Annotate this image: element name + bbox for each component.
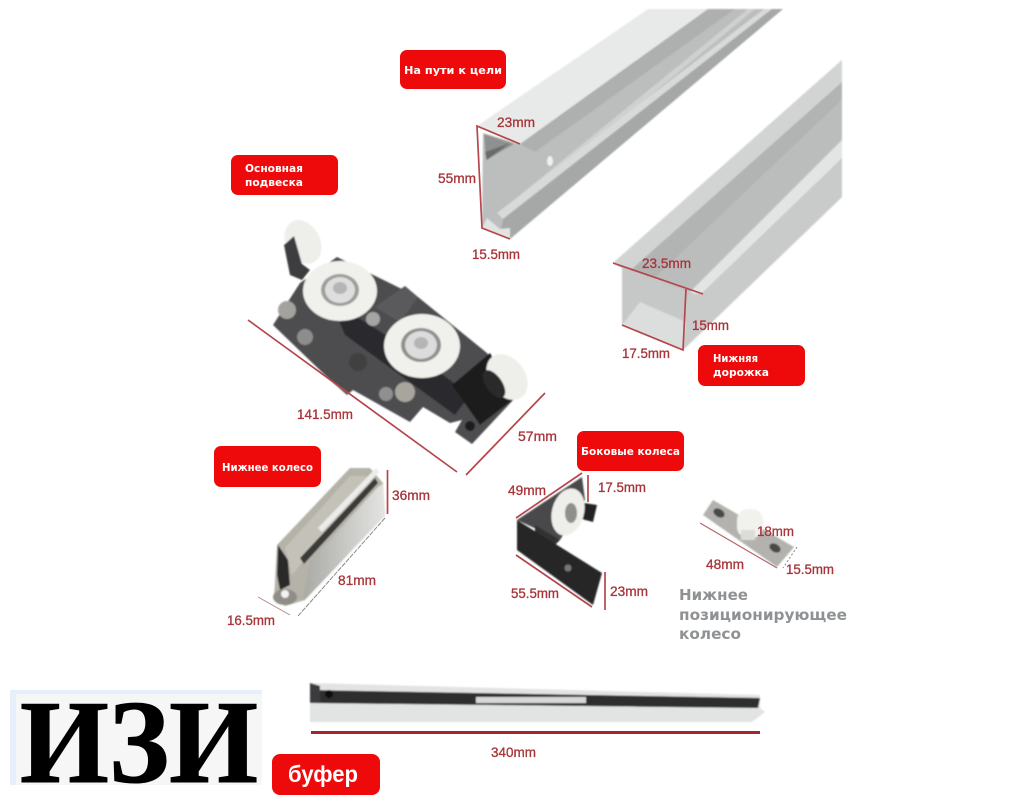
hanger dimension lines: 57mm — [518, 429, 557, 444]
heading label: lower track: дорожка — [713, 367, 769, 379]
heading label: buffer: буфер — [288, 761, 358, 787]
lower wheel part — [273, 468, 385, 606]
side wheel dimensions: 23mm — [610, 584, 648, 599]
heading label: lower track — [698, 345, 805, 386]
side wheel bracket — [517, 477, 602, 605]
caption: positioning wheel: Нижнее — [679, 586, 748, 604]
lower track dimensions: 23.5mm — [642, 256, 691, 271]
positioning wheel part — [703, 500, 794, 567]
upper track dimensions: 55mm — [438, 171, 476, 186]
upper track dimensions: 23mm — [497, 115, 535, 130]
heading label: main hanger — [231, 155, 338, 195]
upper track rail — [477, 9, 783, 239]
heading label: upper track: На пути к цели — [404, 65, 502, 77]
buffer dimension line: 340mm — [491, 745, 536, 760]
positioning wheel dimensions: 15.5mm — [786, 562, 834, 577]
lower track dimensions — [613, 256, 729, 361]
lower track dimensions: 17.5mm — [622, 346, 670, 361]
lower wheel dimensions: 16.5mm — [227, 613, 275, 628]
heading label: upper track — [400, 50, 506, 89]
upper track dimensions: 15.5mm — [472, 247, 520, 262]
side wheel dimensions — [508, 473, 648, 610]
caption: positioning wheel: колесо — [679, 625, 741, 643]
positioning wheel dimensions: 18mm — [757, 524, 794, 539]
roller hanger assembly — [273, 214, 536, 444]
hanger dimension lines — [248, 320, 557, 475]
heading label: main hanger: подвеска — [245, 177, 303, 189]
side wheel dimensions: 17.5mm — [598, 480, 646, 495]
positioning wheel dimensions: 48mm — [706, 557, 744, 572]
side wheel dimensions: 49mm — [508, 483, 546, 498]
heading label: side wheels: Боковые колеса — [581, 446, 680, 458]
hanger dimension lines: 141.5mm — [297, 407, 353, 422]
lower track dimensions: 15mm — [692, 318, 729, 333]
positioning wheel dimensions — [700, 523, 834, 577]
lower wheel dimensions: 81mm — [338, 573, 376, 588]
heading label: lower track: Нижняя — [713, 353, 758, 365]
heading label: main hanger: Основная — [245, 163, 303, 175]
heading label: lower wheel — [214, 446, 321, 487]
side wheel dimensions: 55.5mm — [511, 586, 559, 601]
lower wheel dimensions — [227, 470, 430, 628]
heading label: lower wheel: Нижнее колесо — [222, 462, 313, 474]
heading label: buffer — [272, 754, 380, 795]
heading label: side wheels — [577, 431, 684, 471]
buffer part — [310, 683, 765, 722]
lower wheel dimensions: 36mm — [392, 488, 430, 503]
buffer dimension line — [311, 731, 760, 760]
caption: positioning wheel — [679, 586, 847, 643]
caption: positioning wheel: позиционирующее — [679, 606, 847, 624]
upper track dimensions — [438, 115, 535, 262]
lower track rail — [613, 60, 842, 350]
